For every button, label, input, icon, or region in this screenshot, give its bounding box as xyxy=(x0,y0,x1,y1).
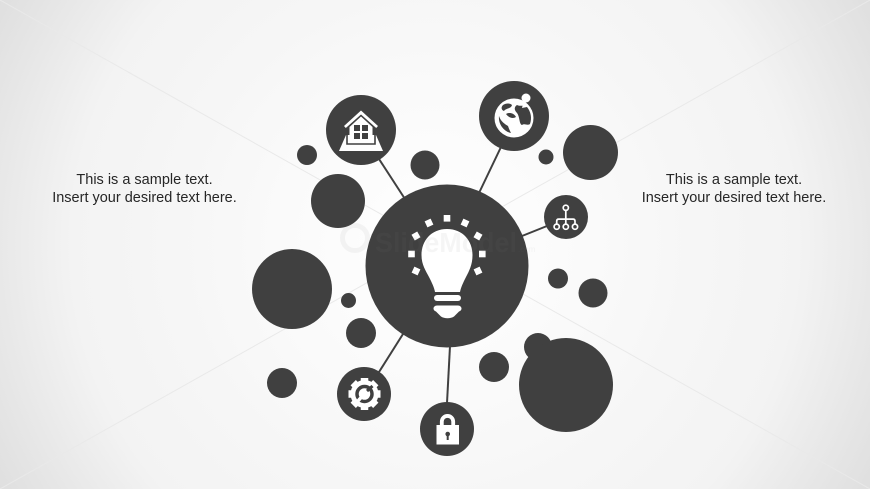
watermark: SlideModel xyxy=(375,227,517,258)
right text block: This is a sample text. xyxy=(666,172,802,188)
org chart node xyxy=(544,195,588,239)
house node xyxy=(326,95,396,165)
icon: house xyxy=(339,110,383,151)
watermark: .com xyxy=(518,245,536,254)
left text block: This is a sample text. xyxy=(76,172,213,188)
globe node xyxy=(479,81,549,151)
icon: light bulb xyxy=(408,215,486,318)
right text block: Insert your desired text here. xyxy=(642,190,826,206)
icon: hierarchy xyxy=(554,205,578,229)
icon: gear with wrench xyxy=(348,378,380,410)
lock node xyxy=(420,402,474,456)
gear node xyxy=(337,367,391,421)
main circle: light bulb xyxy=(366,184,528,348)
icon: globe xyxy=(494,94,534,138)
icon: padlock xyxy=(436,416,459,444)
connector lines xyxy=(379,147,547,403)
left text block: Insert your desired text here. xyxy=(52,190,237,206)
decorative circles xyxy=(252,125,618,432)
